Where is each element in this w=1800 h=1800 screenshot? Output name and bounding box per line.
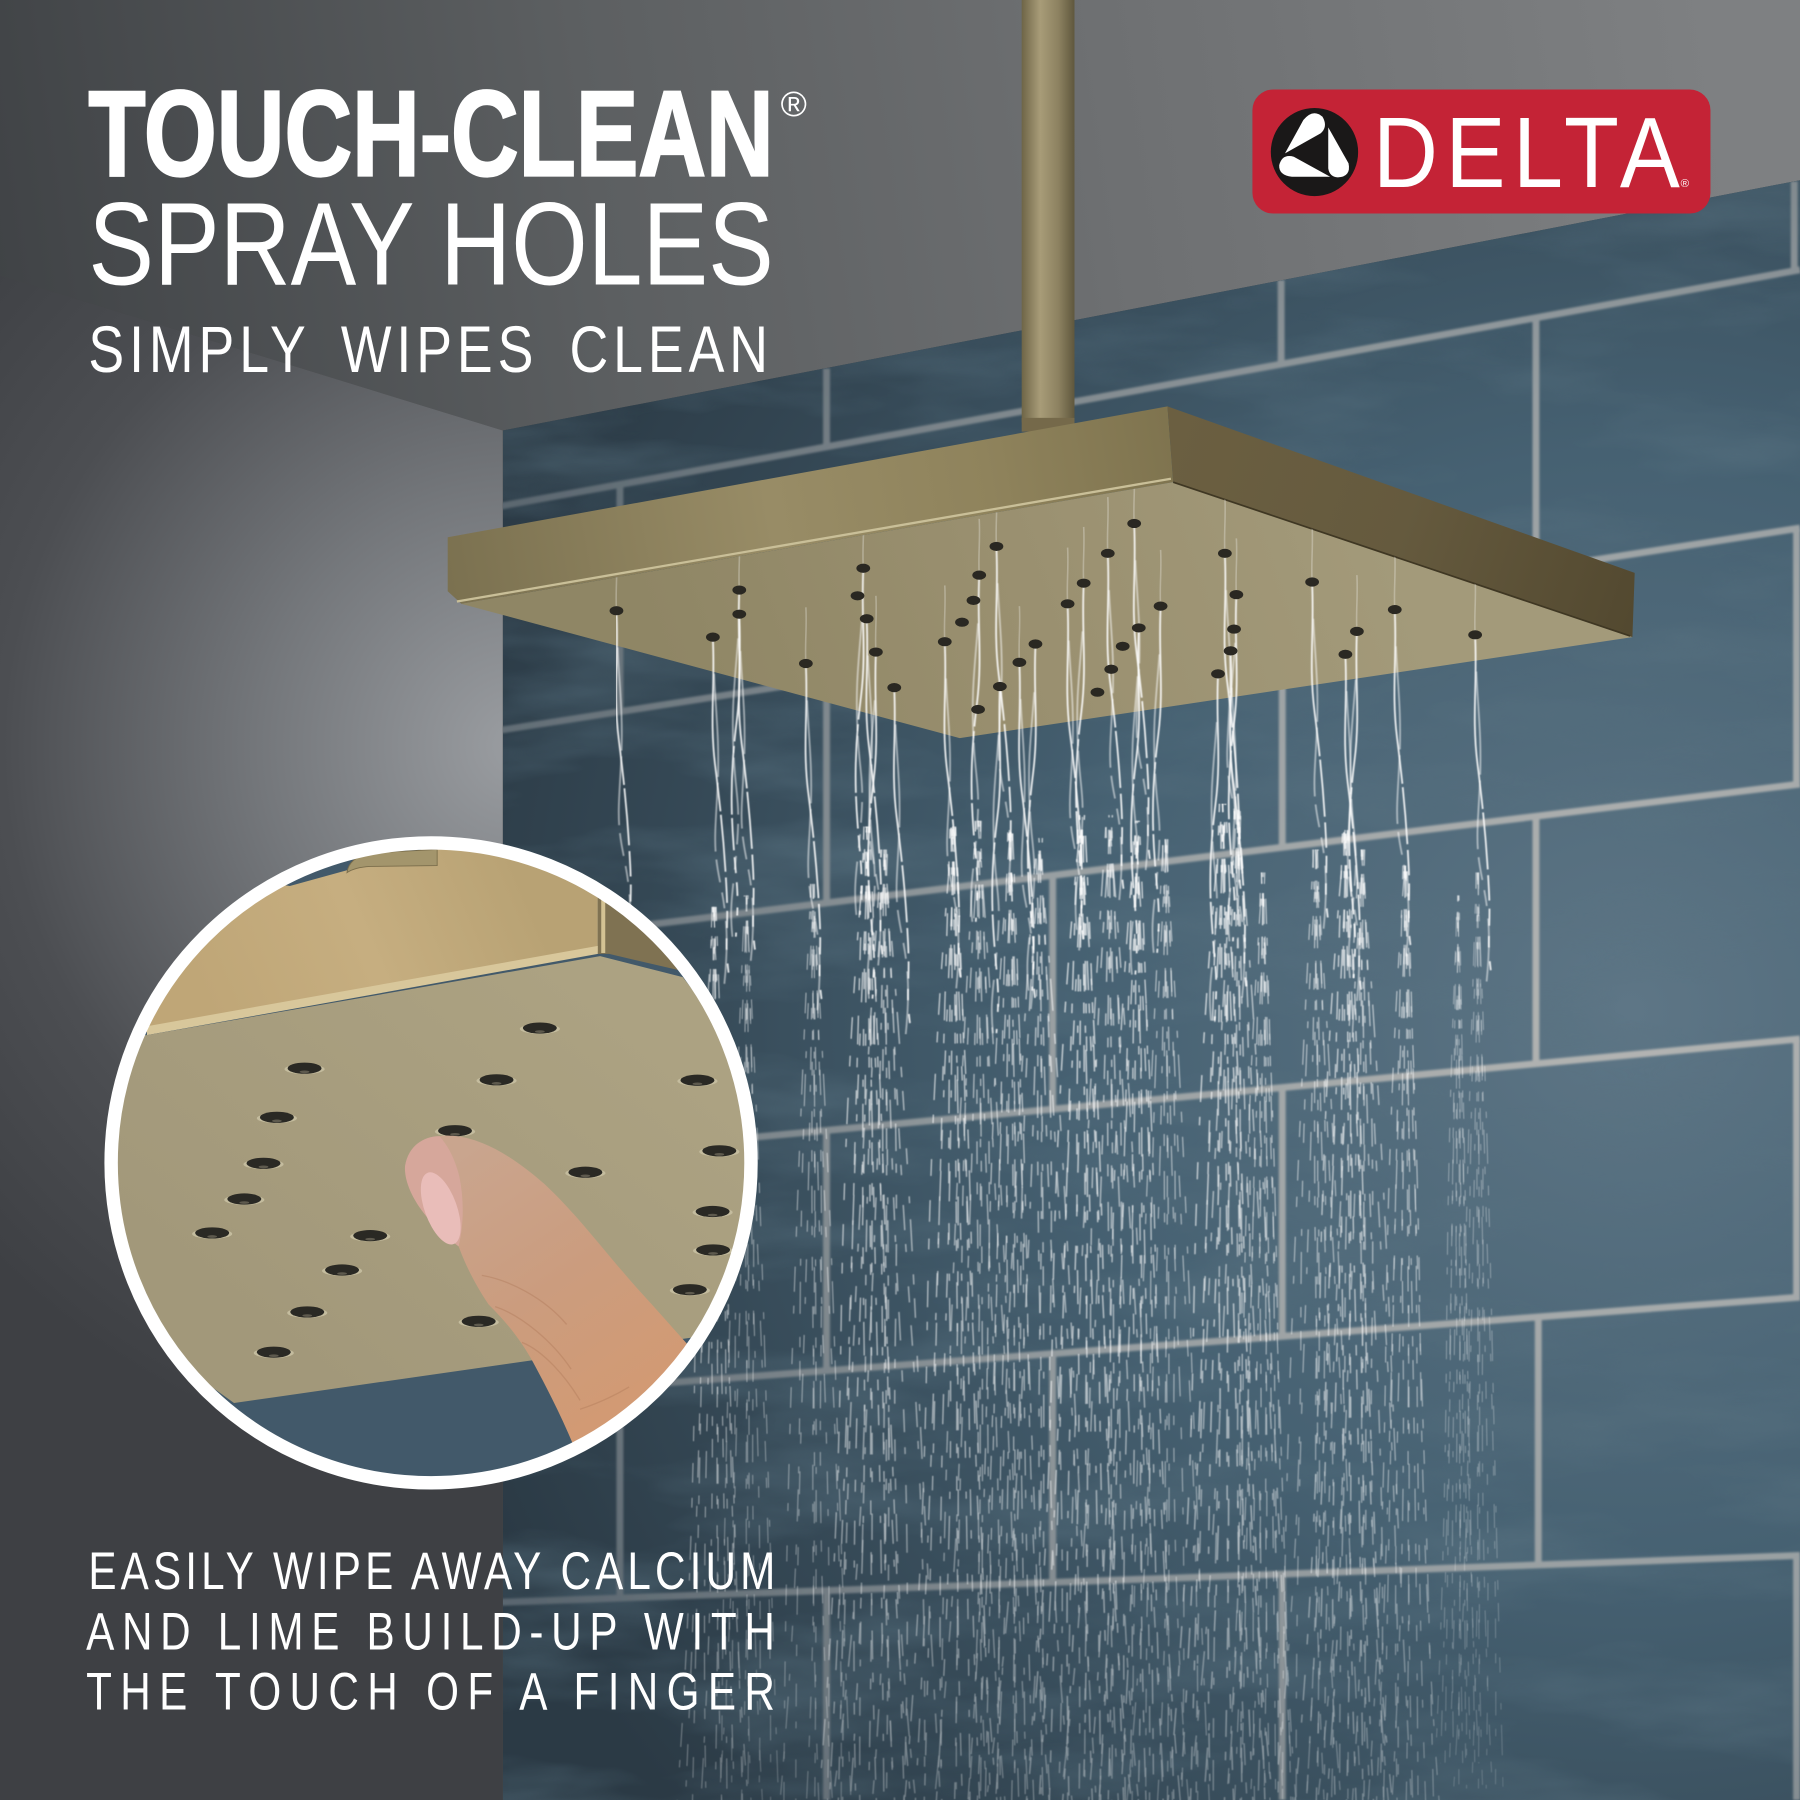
inset circle: finger touching spray holes (102, 833, 776, 1494)
background: ceiling (0, 0, 1800, 430)
Delta logo badge (1252, 90, 1710, 214)
inset right face (598, 887, 705, 976)
caption line 3: THE TOUCH OF A FINGER (86, 1663, 775, 1721)
registered mark: ® (781, 84, 807, 124)
shower head underside (461, 482, 1632, 738)
title: Touch-Clean Spray Holes (88, 66, 807, 386)
shower head right face (1167, 406, 1635, 637)
logo wordmark: DELTA (1373, 98, 1680, 209)
icon: Delta triangle mark (1271, 108, 1358, 196)
caption line 1: EASILY WIPE AWAY CALCIUM (88, 1542, 775, 1601)
inset spray holes (192, 1022, 739, 1358)
inset underside plate (107, 956, 776, 1403)
inset mounting collar (347, 849, 437, 873)
water reflections on the plate (615, 488, 1476, 659)
caption text (86, 1542, 775, 1721)
inset white ring (111, 843, 751, 1483)
inset wall background (102, 833, 763, 1494)
shower head (448, 406, 1635, 738)
background: left wall (0, 276, 503, 1800)
background: blue tile wall (494, 172, 1800, 1800)
shower head front face (448, 406, 1173, 604)
subheading: SIMPLY WIPES CLEAN (88, 313, 768, 386)
logo registered mark: ® (1681, 178, 1690, 190)
water droplets falling field (675, 804, 1503, 1800)
spray holes (610, 519, 1482, 714)
heading line 1: TOUCH-CLEAN (88, 66, 774, 202)
inset shower head front face (146, 850, 598, 1032)
finger (405, 1136, 692, 1454)
caption line 2: AND LIME BUILD-UP WITH (86, 1603, 775, 1662)
fingernail (405, 1136, 463, 1246)
water streams from spray holes (616, 526, 1492, 1034)
shower arm stem (1022, 0, 1074, 432)
inset bright edge (147, 946, 598, 1035)
heading line 2: SPRAY HOLES (88, 179, 774, 311)
